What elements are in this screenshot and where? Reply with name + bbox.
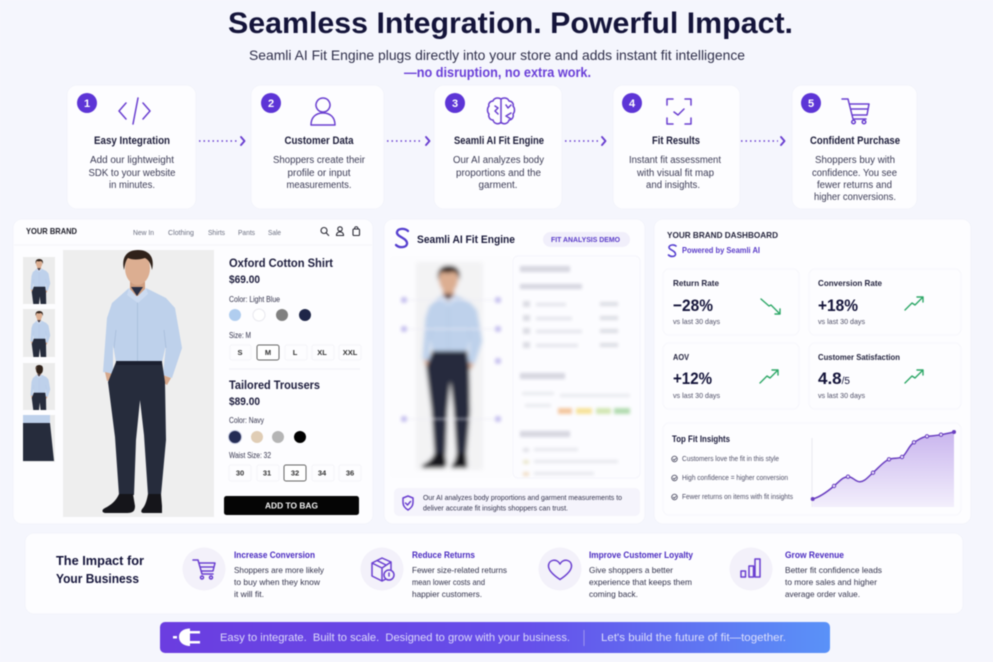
shirt size options: XL bbox=[317, 348, 327, 357]
store nav bbox=[14, 226, 372, 245]
icon: brain bbox=[488, 98, 514, 124]
arrow 2 to 3 bbox=[387, 137, 430, 145]
top fit insights bbox=[663, 423, 961, 515]
icon: shield bbox=[403, 496, 413, 510]
impact heading: The Impact for bbox=[56, 553, 144, 568]
impact: increase conversion: to buy when they know bbox=[234, 577, 321, 587]
cart wheels bbox=[852, 120, 866, 124]
dashboard heading: YOUR BRAND DASHBOARD bbox=[667, 230, 778, 240]
arrow 1 to 2 bbox=[199, 137, 244, 145]
demo pill: FIT ANALYSIS DEMO bbox=[551, 237, 621, 244]
step 5 text: fewer returns and bbox=[817, 180, 892, 191]
panel: store product page bbox=[22, 226, 361, 517]
add to bag button: ADD TO BAG bbox=[265, 500, 318, 510]
step 1 text: in minutes. bbox=[109, 180, 155, 191]
step 2 text: profile or input bbox=[288, 168, 351, 179]
icon: plug bbox=[173, 628, 200, 646]
step 1 text: Add our lightweight bbox=[90, 155, 174, 166]
step 2: Customer Data bbox=[251, 85, 384, 209]
impact: grow revenue: Better fit confidence leads bbox=[785, 565, 882, 575]
step 4 heading: Fit Results bbox=[652, 135, 700, 147]
powered by Seamli bbox=[668, 245, 760, 256]
impact: reduce returns: Reduce Returns bbox=[412, 550, 475, 560]
callout text bbox=[423, 493, 622, 512]
main product photo bbox=[63, 250, 214, 517]
KPI: customer satisfaction: 4.8/5 bbox=[818, 369, 850, 388]
step 5 heading: Confident Purchase bbox=[810, 135, 900, 147]
impact: increase conversion bbox=[182, 548, 325, 599]
shirt size options: M bbox=[265, 348, 271, 357]
impact: reduce returns: mean lower costs and bbox=[412, 577, 485, 587]
step 1 text: SDK to your website bbox=[88, 168, 176, 179]
store nav: Shirts bbox=[208, 228, 225, 237]
step 3 text: proportions and the bbox=[456, 168, 541, 179]
step 3 text bbox=[453, 155, 544, 191]
KPI: conversion rate bbox=[809, 269, 961, 335]
badge 5: 5 bbox=[808, 98, 814, 110]
top fit insights: Top Fit Insights bbox=[672, 434, 730, 444]
trousers product details: Color: Navy bbox=[229, 416, 264, 425]
store nav: Clothing bbox=[168, 228, 194, 237]
step 4 text: with visual fit map bbox=[636, 168, 714, 179]
step 5 text: higher conversions. bbox=[814, 192, 896, 203]
shirt product details: Oxford Cotton Shirt bbox=[229, 256, 333, 270]
blurred fit report bbox=[513, 256, 640, 478]
subtitle: —no disruption, no extra work. bbox=[404, 65, 591, 80]
impact: reduce returns: happier customers. bbox=[412, 589, 482, 599]
impact: improve customer loyalty: experience that keeps them bbox=[589, 577, 692, 587]
powered by Seamli: Powered by Seamli AI bbox=[682, 245, 760, 255]
KPI: conversion rate: Conversion Rate bbox=[818, 278, 882, 288]
insight list: Fewer returns on items with fit insights bbox=[682, 492, 793, 501]
store nav: YOUR BRAND bbox=[26, 226, 77, 236]
impact: reduce returns bbox=[360, 548, 507, 599]
impact heading bbox=[56, 553, 144, 586]
badge 3: 3 bbox=[452, 98, 458, 110]
title: Seamless Integration. Powerful Impact. bbox=[228, 7, 793, 40]
step 5 text: confidence. You see bbox=[812, 168, 897, 179]
step 4 text bbox=[629, 155, 721, 191]
panel: the impact for your business bbox=[25, 533, 963, 614]
impact: increase conversion: Increase Conversion bbox=[234, 550, 315, 560]
step 4 text: Instant fit assessment bbox=[629, 155, 721, 166]
step 4: Fit Results bbox=[613, 85, 740, 209]
blurred body scan bbox=[390, 256, 512, 478]
step 1 heading: Easy Integration bbox=[94, 135, 170, 147]
KPI: conversion rate: +18% bbox=[818, 296, 858, 315]
KPI: return rate: vs last 30 days bbox=[673, 317, 720, 326]
trousers product details: Waist Size: 32 bbox=[229, 451, 271, 460]
step 5: Confident Purchase bbox=[792, 85, 917, 209]
waist size options: 34 bbox=[318, 468, 327, 478]
nav icons bbox=[321, 227, 360, 236]
add to bag button bbox=[224, 496, 359, 515]
step 5 text: Shoppers buy with bbox=[815, 155, 895, 166]
step 3: Seamli AI Fit Engine bbox=[434, 85, 562, 209]
shirt product details: Size: M bbox=[229, 331, 251, 340]
callout text: Our AI analyzes body proportions and garment measurements to bbox=[423, 493, 622, 502]
shirt product details: $69.00 bbox=[229, 274, 260, 286]
step 3 text: Our AI analyzes body bbox=[453, 155, 544, 166]
store nav: New In bbox=[133, 228, 154, 237]
KPI: return rate bbox=[663, 269, 799, 335]
step 5 text bbox=[812, 155, 897, 203]
shirt size options: S bbox=[237, 348, 243, 357]
arrow 3 to 4 bbox=[565, 137, 606, 145]
demo pill bbox=[543, 232, 630, 247]
KPI: customer satisfaction bbox=[809, 343, 961, 409]
trousers product details bbox=[228, 378, 320, 460]
icon: cart bbox=[842, 99, 869, 119]
KPI: return rate: Return Rate bbox=[673, 278, 719, 288]
insight list bbox=[672, 454, 793, 501]
impact: increase conversion: Shoppers are more likely bbox=[234, 565, 325, 575]
KPI: AOV: +12% bbox=[673, 369, 712, 388]
banner closing line: Let's build the future of fit—together. bbox=[601, 632, 786, 644]
panel: brand dashboard bbox=[654, 219, 971, 524]
impact: improve customer loyalty bbox=[538, 548, 693, 599]
step 4 text: and insights. bbox=[646, 180, 700, 191]
footer banner bbox=[160, 622, 830, 653]
callout: fit insights trust bbox=[394, 488, 640, 516]
step 2 text bbox=[273, 155, 366, 191]
trousers product details: Tailored Trousers bbox=[229, 378, 320, 392]
subtitle bbox=[249, 47, 745, 80]
step 2 text: measurements. bbox=[286, 180, 352, 191]
waist size options: 32 bbox=[291, 468, 299, 478]
KPI: AOV: vs last 30 days bbox=[673, 391, 720, 400]
badge 4: 4 bbox=[629, 98, 636, 110]
waist size options bbox=[229, 465, 361, 481]
badge 2: 2 bbox=[268, 98, 274, 110]
step 3 heading: Seamli AI Fit Engine bbox=[454, 135, 544, 147]
engine heading: Seamli AI Fit Engine bbox=[417, 234, 515, 246]
impact: grow revenue: to more sales and higher bbox=[785, 577, 877, 587]
step 2 text: Shoppers create their bbox=[273, 155, 366, 166]
impact: reduce returns: Fewer size-related returns bbox=[412, 565, 507, 575]
shirt product details bbox=[229, 256, 333, 340]
KPI: conversion rate: vs last 30 days bbox=[818, 317, 865, 326]
icon: person bbox=[311, 98, 335, 125]
line chart bbox=[811, 430, 956, 507]
waist size options: 31 bbox=[263, 468, 271, 478]
panel: Seamli AI Fit Engine demo bbox=[384, 219, 645, 524]
step 2 heading: Customer Data bbox=[284, 135, 354, 147]
icon: scan check bbox=[667, 99, 691, 124]
impact: grow revenue: Grow Revenue bbox=[785, 550, 844, 560]
impact: increase conversion: it will fit. bbox=[234, 589, 264, 599]
store nav: Sale bbox=[268, 228, 281, 237]
trousers product details: $89.00 bbox=[229, 396, 260, 408]
waist size options: 36 bbox=[346, 468, 354, 478]
KPI: return rate: −28% bbox=[673, 296, 713, 315]
KPI: customer satisfaction: vs last 30 days bbox=[818, 391, 865, 400]
shirt size options bbox=[230, 345, 361, 360]
callout text: deliver accurate fit insights shoppers can trust. bbox=[423, 504, 568, 512]
step 3 text: garment. bbox=[478, 180, 518, 191]
KPI: customer satisfaction: Customer Satisfaction bbox=[818, 352, 900, 362]
shirt size options: L bbox=[293, 348, 298, 357]
subtitle: Seamli AI Fit Engine plugs directly into your store and adds instant fit intelligence bbox=[249, 47, 745, 63]
insight list: High confidence = higher conversion bbox=[682, 473, 788, 482]
product thumbnails bbox=[23, 257, 55, 462]
badge 1: 1 bbox=[84, 98, 90, 110]
step 1: Easy Integration bbox=[67, 85, 196, 209]
impact: improve customer loyalty: Give shoppers a better bbox=[589, 565, 673, 575]
shirt size options: XXL bbox=[343, 348, 358, 357]
banner message: Easy to integrate. Built to scale. Designed to grow with your business. bbox=[220, 632, 570, 644]
impact: grow revenue: average order value. bbox=[785, 589, 860, 599]
icon: code bbox=[119, 98, 150, 124]
Seamli logo bbox=[396, 229, 408, 247]
waist size options: 30 bbox=[236, 468, 244, 478]
impact: improve customer loyalty: coming back. bbox=[589, 589, 638, 599]
KPI: AOV: AOV bbox=[673, 352, 689, 362]
insight list: Customers love the fit in this style bbox=[682, 454, 779, 463]
impact: grow revenue bbox=[730, 548, 882, 599]
shirt product details: Color: Light Blue bbox=[229, 295, 280, 304]
KPI: AOV bbox=[663, 343, 799, 409]
impact heading: Your Business bbox=[56, 571, 139, 586]
arrow 4 to 5 bbox=[741, 137, 784, 145]
step 1 text bbox=[88, 155, 176, 191]
impact: improve customer loyalty: Improve Customer Loyalty bbox=[589, 550, 693, 560]
store nav: Pants bbox=[238, 228, 255, 237]
